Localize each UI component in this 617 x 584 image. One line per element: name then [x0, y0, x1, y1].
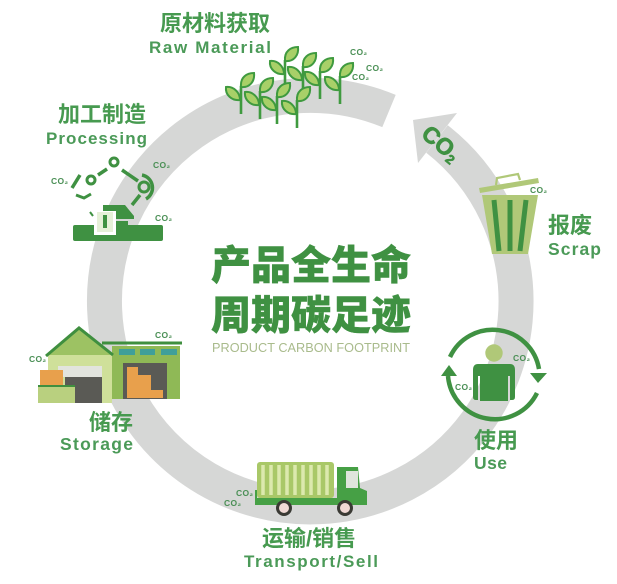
arrow label: CO2: 2 — [443, 151, 458, 167]
stage: processing — [46, 102, 172, 241]
title: 产品全生命 — [211, 243, 411, 288]
CO2 marks: CO₂ — [51, 176, 68, 186]
label: Storage: Storage — [60, 434, 133, 454]
icon: sprouts — [226, 47, 353, 128]
CO2 marks — [51, 160, 172, 223]
label: Use: Use — [474, 453, 507, 473]
heading: raw material: 原材料获取 — [160, 11, 270, 36]
CO2 marks: CO₂ — [153, 160, 170, 170]
CO2 marks: CO₂ — [513, 353, 530, 363]
heading: use: 使用 — [474, 428, 518, 453]
CO2 marks: CO₂ — [236, 488, 253, 498]
icon: robot arm — [72, 158, 163, 241]
label: Processing: Processing — [46, 129, 147, 148]
heading: processing: 加工制造 — [58, 102, 146, 127]
label: Transport/Sell: Transport/Sell — [244, 552, 378, 571]
CO2 marks: CO₂ — [455, 382, 472, 392]
CO2 marks — [29, 330, 172, 364]
icon: trash bin — [479, 174, 539, 254]
CO2 marks: CO₂ — [352, 72, 369, 82]
title — [211, 243, 411, 355]
heading: transport: 运输/销售 — [262, 526, 356, 551]
stage: use — [441, 330, 547, 473]
CO2 marks: CO₂ — [155, 330, 172, 340]
CO2 marks: CO₂ — [366, 63, 383, 73]
title: 周期碳足迹 — [211, 294, 411, 338]
CO2 marks — [350, 47, 383, 82]
subtitle: PRODUCT CARBON FOOTPRINT — [212, 341, 410, 355]
heading: storage: 储存 — [89, 410, 133, 435]
icon: warehouse — [38, 328, 182, 403]
CO2 marks: CO₂ — [350, 47, 367, 57]
icon: person with recycle arrows — [441, 330, 547, 419]
label: Scrap: Scrap — [548, 239, 601, 259]
stage: storage — [29, 328, 182, 454]
stage: scrap — [479, 174, 601, 259]
stage: transport — [224, 462, 378, 571]
arrow: cycle arrow head — [413, 113, 457, 163]
gray life cycle ring — [104, 95, 516, 507]
CO2 marks — [224, 488, 253, 508]
CO2 marks — [455, 353, 530, 392]
heading: scrap: 报废 — [548, 213, 592, 238]
CO2 marks: CO₂ — [224, 498, 241, 508]
CO2 marks: CO₂ — [29, 354, 46, 364]
label: Raw Material: Raw Material — [149, 38, 271, 57]
CO2 marks: CO₂ — [155, 213, 172, 223]
arrow label: CO2: CO — [417, 120, 460, 162]
icon: truck — [255, 462, 367, 514]
CO2 mark: CO₂ — [530, 185, 547, 195]
stage: raw material — [149, 11, 383, 128]
